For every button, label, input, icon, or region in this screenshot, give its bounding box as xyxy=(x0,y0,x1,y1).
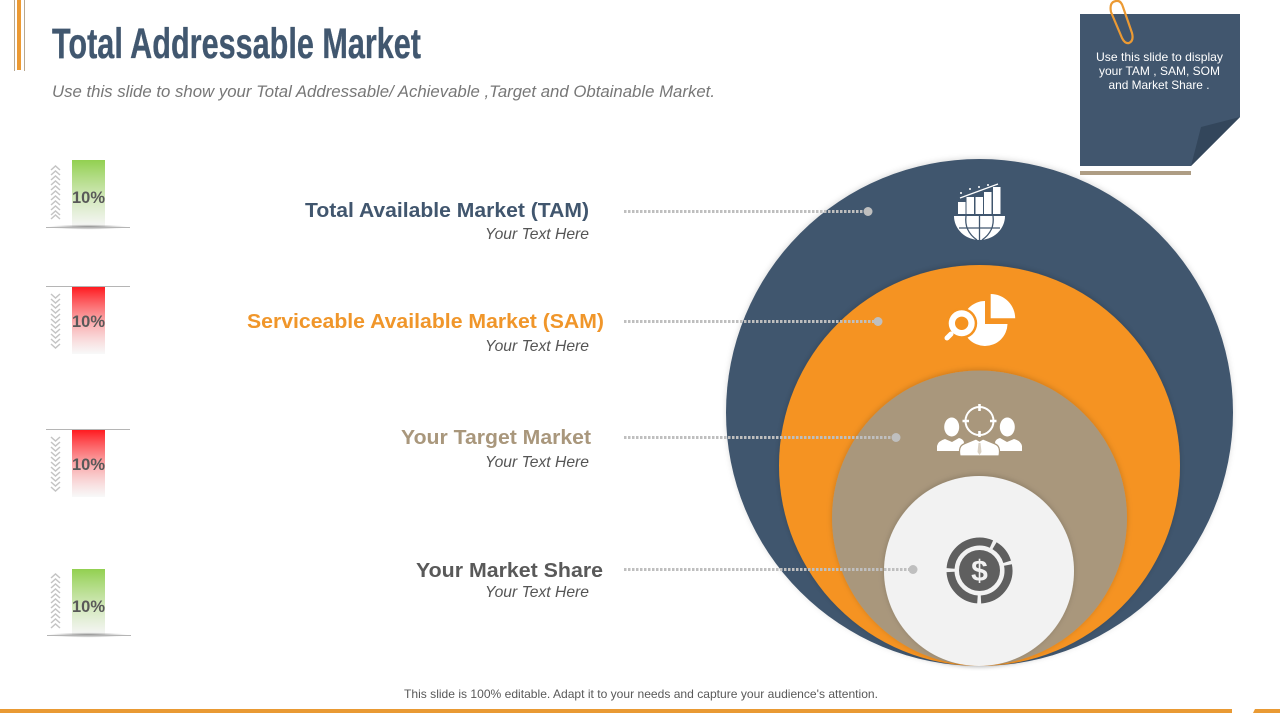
indicator: TAM 10% up: 10% xyxy=(72,188,105,207)
circle: SAM xyxy=(779,265,1180,666)
note underline xyxy=(1080,171,1191,175)
icon: team with target xyxy=(937,404,1022,456)
note text xyxy=(1096,50,1223,92)
icon: globe with rising bars xyxy=(954,184,1005,240)
leader line: SAM xyxy=(624,317,882,326)
indicator: SAM 10% down: 10% xyxy=(72,312,105,331)
label: target market: Your Target Market xyxy=(401,427,591,449)
circle: market share xyxy=(884,476,1074,666)
title: Total Addressable Market xyxy=(52,20,421,68)
label: TAM: Your Text Here xyxy=(485,226,589,243)
label: market share xyxy=(416,560,603,601)
indicator: TAM 10% up xyxy=(46,160,130,230)
leader line: TAM xyxy=(624,207,872,216)
sticky note xyxy=(1080,1,1240,175)
icon: dollar coin: $ xyxy=(971,555,988,588)
title accent bars xyxy=(14,0,25,71)
label: market share: Your Text Here xyxy=(485,584,589,601)
indicator: target market 10% down xyxy=(46,429,130,497)
note body xyxy=(1080,14,1240,166)
indicator: target market 10% down: 10% xyxy=(72,455,105,474)
indicator: market share 10% up: 10% xyxy=(72,597,105,616)
label: SAM xyxy=(247,311,604,355)
paper clip xyxy=(1111,1,1133,43)
leader line: market share xyxy=(624,565,918,574)
note folded corner xyxy=(1191,117,1240,166)
icon: pie chart with magnifier xyxy=(946,294,1015,346)
icon: dollar coin xyxy=(945,536,1014,605)
indicator: SAM 10% down xyxy=(46,286,130,354)
note text: and Market Share . xyxy=(1108,78,1210,92)
label: SAM: Your Text Here xyxy=(485,338,589,355)
label: target market xyxy=(401,427,591,471)
label: market share: Your Market Share xyxy=(416,560,603,582)
label: TAM xyxy=(305,200,589,243)
indicator: market share 10% up xyxy=(47,569,131,638)
note text: Use this slide to display xyxy=(1096,50,1223,64)
label: SAM: Serviceable Available Market (SAM) xyxy=(247,311,604,333)
subtitle: Use this slide to show your Total Addressable/ Achievable ,Target and Obtainable Market. xyxy=(52,82,715,101)
label: TAM: Total Available Market (TAM) xyxy=(305,200,589,222)
leader line: target market xyxy=(624,433,900,442)
label: target market: Your Text Here xyxy=(485,454,589,471)
circle: TAM xyxy=(726,159,1233,666)
footer bar xyxy=(0,709,1280,713)
nested market circles xyxy=(726,159,1233,666)
circle: target market xyxy=(832,370,1127,666)
note text: your TAM , SAM, SOM xyxy=(1099,64,1220,78)
footer note: This slide is 100% editable. Adapt it to your needs and capture your audience's attention. xyxy=(404,687,878,701)
